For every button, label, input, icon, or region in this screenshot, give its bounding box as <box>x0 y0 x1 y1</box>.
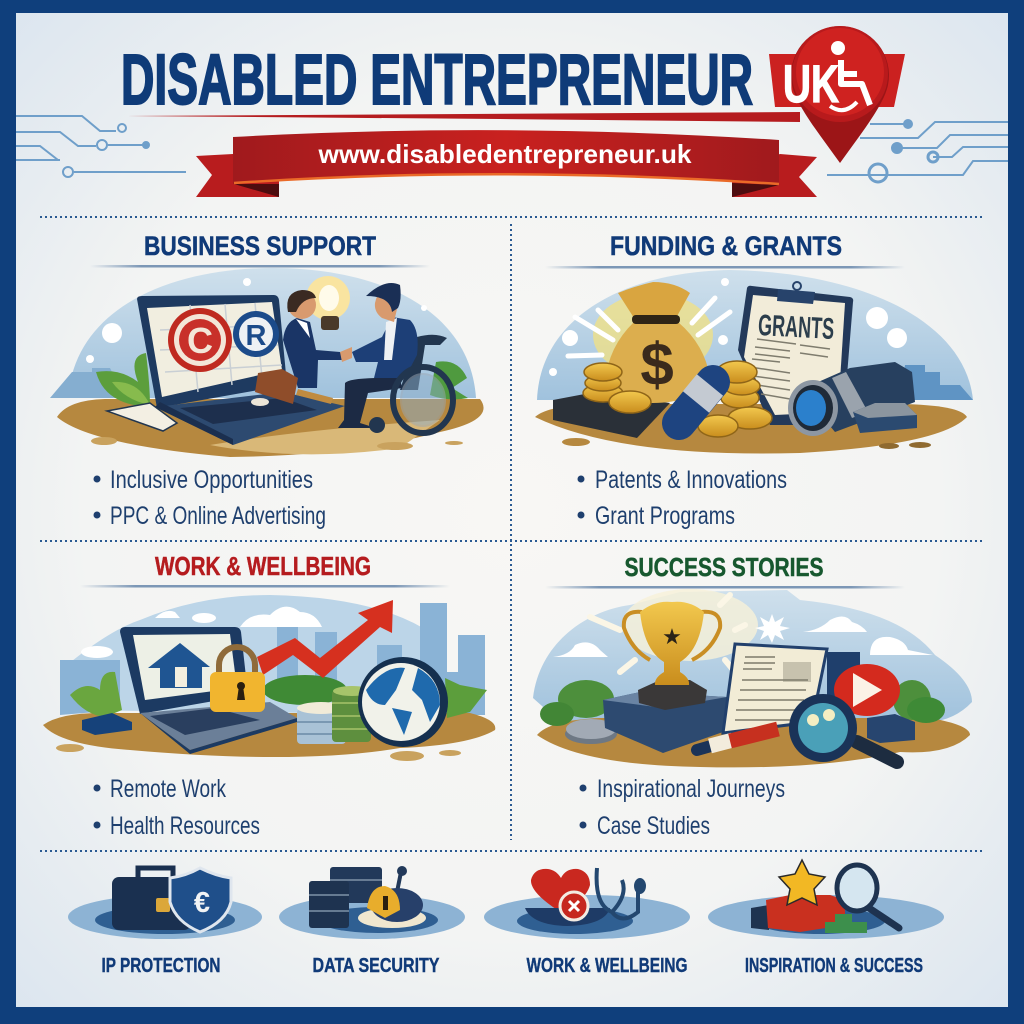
icon: briefcase and gavel <box>251 369 333 406</box>
icon block: IP protection <box>68 868 262 977</box>
icon: capsule <box>679 382 713 423</box>
icon: data stack <box>297 686 371 744</box>
icon: money bag <box>605 282 710 403</box>
icon: leaves left <box>70 672 122 717</box>
icon: money bag: $ <box>640 331 674 398</box>
icon: registered <box>233 311 279 357</box>
icon: registered: R <box>246 320 267 352</box>
panel: funding and grants <box>535 231 973 530</box>
icon: trophy: ★ <box>662 624 682 649</box>
icon: document <box>723 644 827 733</box>
bullet list: work and wellbeing: Health Resources <box>110 812 260 840</box>
panel: business support <box>50 231 484 530</box>
icon: bushes left <box>540 680 614 726</box>
heading: funding and grants: FUNDING & GRANTS <box>610 231 842 261</box>
label: data security: DATA SECURITY <box>312 955 440 977</box>
icon: left coin stack <box>583 363 651 413</box>
icon: trophy <box>624 602 720 685</box>
icon: device base <box>553 393 670 438</box>
heading: work and wellbeing: WORK & WELLBEING <box>155 551 371 581</box>
icon: magnifier <box>789 694 897 762</box>
bullet list: work and wellbeing: Remote Work <box>110 775 226 803</box>
icon block: data security <box>279 866 465 977</box>
icon: leaves right <box>445 678 487 718</box>
bullet list: funding and grants: Patents & Innovations <box>595 466 787 494</box>
URL ribbon: www.disabledentrepreneur.uk <box>317 139 692 169</box>
bullet list: work and wellbeing <box>94 775 260 840</box>
icon: grants clipboard: GRANTS <box>757 309 835 346</box>
icon: trophy plinth <box>603 680 727 753</box>
label: work and wellbeing: WORK & WELLBEING <box>526 955 688 977</box>
icon: bushes right <box>893 680 945 723</box>
heading: success stories: SUCCESS STORIES <box>624 552 824 582</box>
UK badge: UK <box>783 55 839 114</box>
person right with wheelchair <box>338 283 453 433</box>
icon: bush <box>263 675 347 705</box>
icon: camera <box>788 362 917 436</box>
arrow: growth <box>257 600 393 678</box>
icon: grants clipboard <box>738 282 853 425</box>
icon: blue device <box>82 713 132 735</box>
URL ribbon <box>196 130 817 197</box>
icon: disc <box>565 719 617 744</box>
circuit decoration right <box>827 120 1008 182</box>
bullet list: business support <box>94 466 326 530</box>
illustration: work and wellbeing <box>43 595 495 761</box>
icon: right coin stack <box>698 361 772 437</box>
label: IP protection: IP PROTECTION <box>102 955 220 977</box>
icon block: work and wellbeing <box>484 868 690 977</box>
heading: business support: BUSINESS SUPPORT <box>144 231 376 261</box>
icon: laptop <box>137 295 345 445</box>
icon: navy box <box>867 714 915 743</box>
icon: copyright: C <box>187 320 213 361</box>
illustration: success stories <box>533 589 972 767</box>
bullet list: success stories: Case Studies <box>597 812 710 840</box>
bullet list: success stories: Inspirational Journeys <box>597 775 785 803</box>
icon: copyright <box>168 308 232 372</box>
circuit decoration left <box>16 116 186 177</box>
illustration: business support <box>50 268 484 457</box>
illustration: funding and grants <box>535 270 973 454</box>
icon: globe <box>358 657 448 747</box>
bullet list: success stories <box>580 775 785 840</box>
UK badge <box>769 26 905 163</box>
bullet list: funding and grants <box>578 466 787 530</box>
icon block: inspiration and success <box>708 860 944 977</box>
icon block: IP protection: € <box>194 887 210 919</box>
panel: success stories <box>533 552 972 840</box>
icon: light bulb <box>306 276 350 330</box>
person left <box>283 290 345 388</box>
panel: work and wellbeing <box>43 551 495 840</box>
bullet list: business support: PPC & Online Advertising <box>110 502 326 530</box>
icon: pen <box>697 729 778 750</box>
icon: laptop with house <box>120 627 297 754</box>
icon: play button <box>834 664 900 716</box>
title underline <box>122 112 800 122</box>
label: inspiration and success: INSPIRATION & SUCCESS <box>745 955 923 977</box>
icon: leaves <box>96 353 468 407</box>
bullet list: funding and grants: Grant Programs <box>595 502 735 530</box>
bullet list: business support: Inclusive Opportunities <box>110 466 313 494</box>
icon: padlock <box>210 647 265 712</box>
icon: wheelchair <box>830 41 870 110</box>
